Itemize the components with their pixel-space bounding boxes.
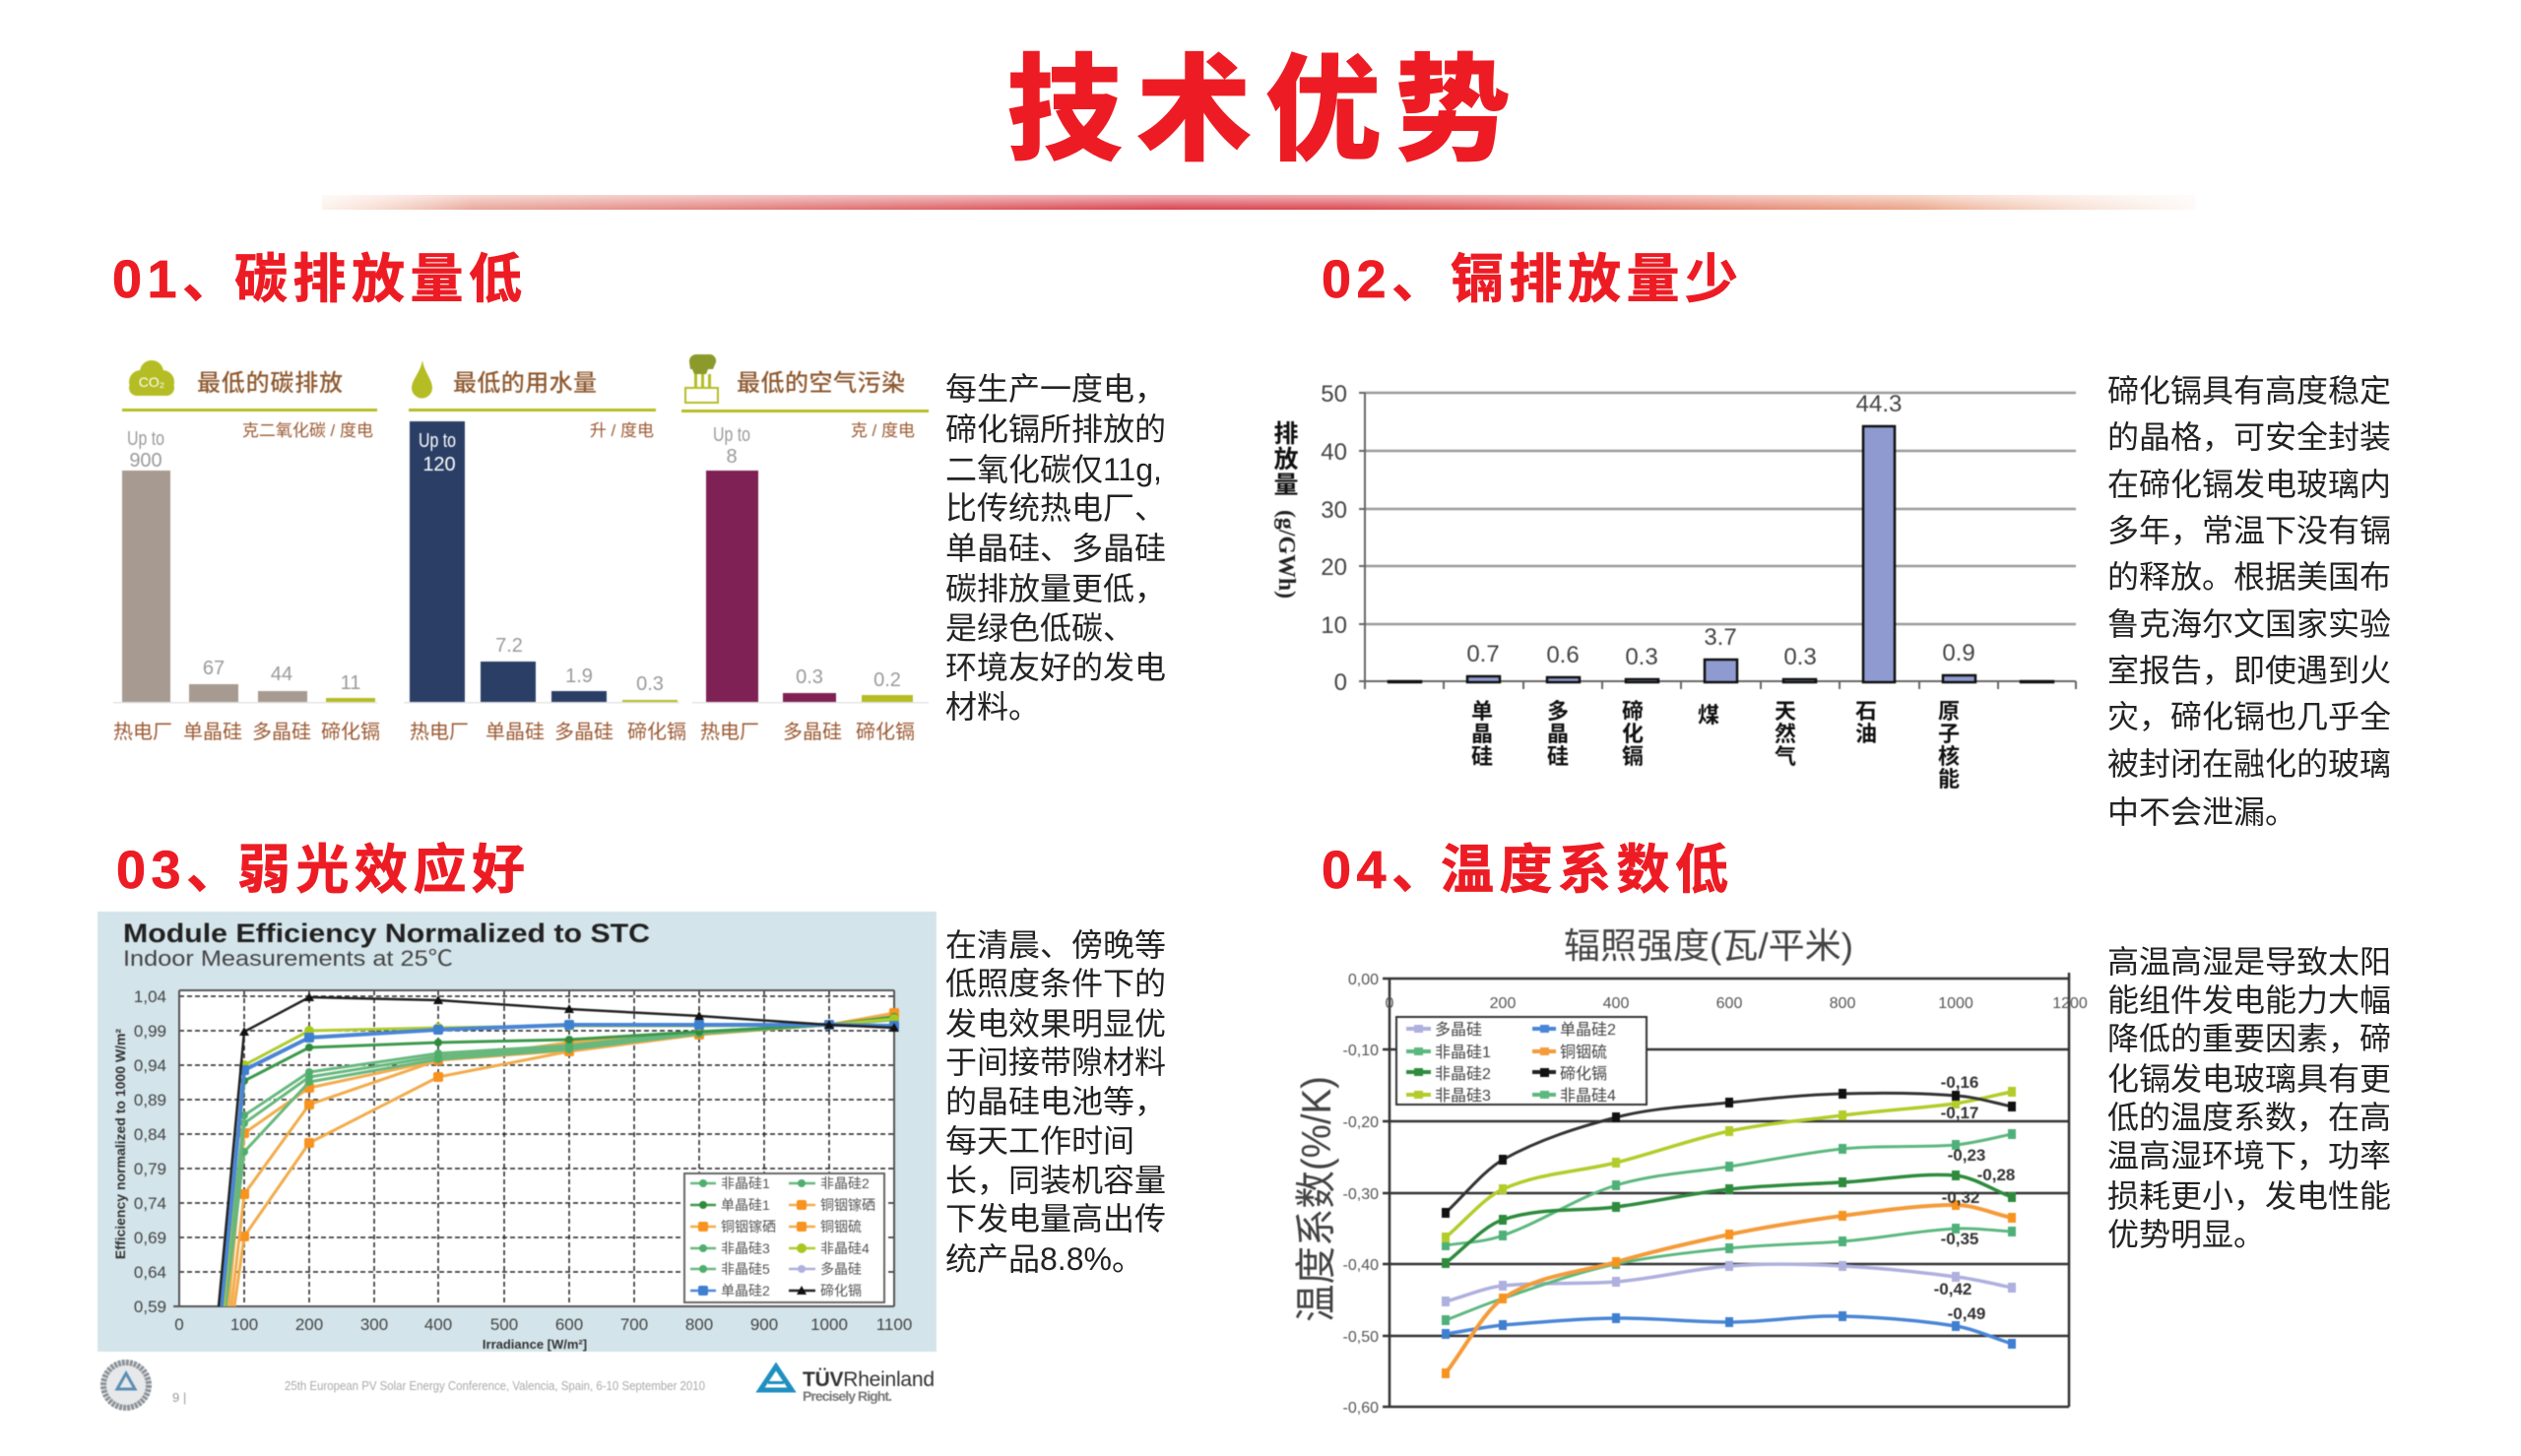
category labels: 核 xyxy=(1938,744,1960,769)
y axis labels: 0,59 xyxy=(134,1298,166,1316)
icon: CO2 cloud xyxy=(129,360,174,396)
x axis labels: 600 xyxy=(555,1315,583,1334)
x axis labels: 0 xyxy=(174,1315,184,1334)
x axis labels: 200 xyxy=(1490,995,1516,1012)
value labels: 0.3 xyxy=(1783,644,1817,670)
x axis labels: 600 xyxy=(1716,995,1742,1012)
category labels: 镉 xyxy=(1622,744,1644,769)
text block: 04: 低的温度系数，在高 xyxy=(2107,1100,2391,1135)
category labels: 碲 xyxy=(1622,699,1644,724)
value labels: 0.3 xyxy=(1625,644,1658,670)
text block: 03: 统产品8.8%。 xyxy=(945,1241,1143,1277)
category labels: 然 xyxy=(1775,722,1796,746)
category labels: 天 xyxy=(1775,699,1796,724)
y axis labels: -0,50 xyxy=(1343,1329,1379,1346)
data labels xyxy=(1934,1073,2015,1323)
category labels: 子 xyxy=(1938,722,1960,746)
bars: carbon xyxy=(122,471,375,702)
axis numbers: 20 xyxy=(1321,554,1347,581)
value labels xyxy=(1466,391,1975,670)
bars xyxy=(1389,426,2053,682)
legend: 铜铟镓硒 xyxy=(820,1197,875,1213)
legend: 非晶硅4 xyxy=(820,1240,870,1256)
x axis labels xyxy=(1386,995,2088,1012)
category labels: 硅 xyxy=(1471,744,1493,769)
y axis labels xyxy=(1343,972,1379,1417)
bar values: Up to xyxy=(419,430,456,452)
heading: 01: 01、 xyxy=(112,250,241,309)
y axis labels: -0,40 xyxy=(1343,1257,1379,1274)
legend: 单晶硅2 xyxy=(721,1283,770,1298)
data labels: -0,28 xyxy=(1977,1166,2015,1184)
bars: water xyxy=(410,421,678,702)
data labels: -0,35 xyxy=(1941,1230,1978,1248)
title divider bar xyxy=(322,195,2195,210)
x axis labels: 900 xyxy=(750,1315,778,1334)
legend: 单晶硅1 xyxy=(721,1197,770,1213)
category labels: 多 xyxy=(1547,699,1569,724)
category labels: 原 xyxy=(1938,699,1960,724)
heading: 03: 03、 xyxy=(116,841,245,900)
axis numbers xyxy=(1321,381,1347,696)
category labels: 多晶硅 xyxy=(252,721,311,743)
category labels: 碲化镉 xyxy=(321,721,380,743)
category labels: 多晶硅 xyxy=(783,721,842,743)
y axis labels: -0,20 xyxy=(1343,1114,1379,1131)
category labels xyxy=(113,721,915,743)
legend: 碲化镉 xyxy=(820,1283,862,1298)
bar values: 1.9 xyxy=(565,665,593,687)
bar values: 67 xyxy=(203,658,225,679)
text block: 01: 碳排放量更低， xyxy=(945,571,1166,606)
y axis title: 温度系数(%/K) xyxy=(1293,1076,1339,1322)
x axis labels: 400 xyxy=(424,1315,452,1334)
legend: 非晶硅2 xyxy=(820,1175,870,1191)
value labels: 0.7 xyxy=(1466,641,1500,667)
category labels: 油 xyxy=(1855,722,1877,746)
x axis title: Irradiance [W/m²] xyxy=(483,1337,587,1352)
y axis title: (g/GWh) xyxy=(1273,510,1299,599)
x axis labels: 1100 xyxy=(876,1315,912,1334)
text block: 03: 下发电量高出传 xyxy=(945,1201,1166,1236)
category labels: 硅 xyxy=(1547,744,1569,769)
title: 技术优势 xyxy=(1006,46,1511,176)
legend: 非晶硅5 xyxy=(721,1261,770,1277)
panel: carbon, water, air bar charts: 克 / 度电 xyxy=(851,421,915,440)
bar values: Up to xyxy=(713,424,750,446)
category labels xyxy=(1471,699,1960,791)
x axis labels: 100 xyxy=(230,1315,258,1334)
y axis title: Efficiency normalized to 1000 W/m² xyxy=(112,1029,128,1259)
y axis labels: 0,84 xyxy=(134,1125,166,1144)
y axis labels: -0,60 xyxy=(1343,1400,1379,1417)
text block: 01: 每生产一度电， xyxy=(945,371,1166,407)
category labels: 热电厂 xyxy=(700,721,759,743)
category labels: 气 xyxy=(1775,744,1796,769)
data labels: -0,23 xyxy=(1948,1146,1985,1165)
chart: temperature coefficient xyxy=(1293,925,2088,1417)
bars: air xyxy=(706,471,913,702)
y axis title: 排 xyxy=(1273,420,1299,448)
legend: 非晶硅1 xyxy=(1435,1044,1491,1061)
y axis labels: 0,99 xyxy=(134,1022,166,1041)
text block: 04: 化镉发电玻璃具有更 xyxy=(2107,1061,2391,1097)
chart title: 辐照强度(瓦/平米) xyxy=(1564,925,1853,966)
x axis labels: 200 xyxy=(295,1315,323,1334)
text block: 02: 多年，常温下没有镉 xyxy=(2107,513,2391,548)
legend: 碲化镉 xyxy=(1560,1065,1607,1083)
bar values: 0.3 xyxy=(636,673,664,695)
text block: 02: 的晶格，可安全封装 xyxy=(2107,419,2391,455)
text block: 04: 温高湿环境下，功率 xyxy=(2107,1138,2391,1173)
text block: 01: 单晶硅、多晶硅 xyxy=(945,531,1166,566)
legend: 多晶硅 xyxy=(820,1261,862,1277)
chart subtitle: Indoor Measurements at 25℃ xyxy=(123,946,453,971)
text block: 01: 二氧化碳仅11g, xyxy=(945,452,1162,487)
heading: 02: 02、 xyxy=(1322,250,1451,309)
axis numbers: 30 xyxy=(1321,497,1347,524)
value labels: 0.9 xyxy=(1942,640,1975,666)
text block: 03: 长，同装机容量 xyxy=(945,1163,1166,1198)
y axis labels: 0,64 xyxy=(134,1263,166,1282)
data labels: -0,16 xyxy=(1941,1073,1978,1092)
heading: 02: 镉排放量少 xyxy=(1451,250,1743,309)
curves xyxy=(1446,1092,2012,1373)
bar values: 0.3 xyxy=(796,666,823,688)
axis numbers: 0 xyxy=(1334,669,1347,696)
icon: factory xyxy=(685,354,718,403)
legend: 非晶硅3 xyxy=(1435,1087,1491,1105)
bar values: Up to xyxy=(127,428,164,450)
category labels: 热电厂 xyxy=(113,721,172,743)
category labels: 多晶硅 xyxy=(554,721,614,743)
panel: carbon, water, air bar charts xyxy=(113,354,929,743)
x axis labels: 800 xyxy=(685,1315,713,1334)
legend: 铜铟镓硒 xyxy=(721,1219,776,1234)
y axis title: 放 xyxy=(1273,446,1299,474)
y axis labels: -0,30 xyxy=(1343,1186,1379,1203)
icon: CO2 cloud: CO₂ xyxy=(139,374,164,390)
text block: 03: 在清晨、傍晚等 xyxy=(945,927,1166,963)
y axis labels: 0,74 xyxy=(134,1194,166,1213)
text block: 02: 中不会泄漏。 xyxy=(2107,794,2296,830)
legend: 铜铟硫 xyxy=(1560,1044,1607,1061)
heading: lowest air pollution: 最低的空气污染 xyxy=(737,370,905,397)
text block: 03: 每天工作时间 xyxy=(945,1123,1134,1159)
axis numbers: 10 xyxy=(1321,612,1347,639)
text block: 01: 材料。 xyxy=(945,689,1040,725)
category labels: 碲化镉 xyxy=(856,721,915,743)
bar values: 11 xyxy=(341,672,360,694)
text block: 04: 降低的重要因素，碲 xyxy=(2107,1021,2391,1056)
data labels: -0,17 xyxy=(1941,1104,1978,1122)
x axis labels: 1200 xyxy=(2052,995,2088,1012)
y axis labels: 0,94 xyxy=(134,1056,166,1075)
category labels: 单 xyxy=(1471,699,1493,724)
text block: 04: 能组件发电能力大幅 xyxy=(2107,982,2391,1018)
category labels: 单晶硅 xyxy=(485,721,545,743)
bar values: 900 xyxy=(129,450,162,472)
text block: 01: 是绿色低碳、 xyxy=(945,610,1134,646)
value labels: 3.7 xyxy=(1704,624,1737,651)
legend xyxy=(684,1173,884,1302)
bar values: 120 xyxy=(422,454,456,475)
x axis labels: 0 xyxy=(1386,995,1394,1012)
category labels: 碲化镉 xyxy=(627,721,686,743)
legend xyxy=(1396,1017,1647,1105)
heading: lowest carbon: 最低的碳排放 xyxy=(197,370,343,397)
legend: 非晶硅1 xyxy=(721,1175,770,1191)
bar values: 44 xyxy=(271,664,292,685)
data labels: -0,49 xyxy=(1948,1304,1985,1323)
axis numbers: 50 xyxy=(1321,381,1347,408)
legend: 铜铟硫 xyxy=(820,1219,862,1234)
value labels: 44.3 xyxy=(1856,391,1902,417)
category labels: 石 xyxy=(1855,699,1877,724)
heading: lowest water: 最低的用水量 xyxy=(453,370,597,397)
axis numbers: 40 xyxy=(1321,439,1347,466)
legend: 非晶硅3 xyxy=(721,1240,770,1256)
category labels: 单晶硅 xyxy=(183,721,242,743)
category labels: 化 xyxy=(1622,722,1644,746)
text block: 03: 的晶硅电池等， xyxy=(945,1084,1166,1119)
y axis labels: 1,04 xyxy=(134,987,166,1006)
category labels: 晶 xyxy=(1547,722,1569,746)
footer: conference text: 25th European PV Solar Energy Conference, Valencia, Spain, 6-10 September 2010 xyxy=(285,1378,705,1393)
legend: 多晶硅 xyxy=(1435,1021,1482,1039)
x axis labels: 1000 xyxy=(1938,995,1973,1012)
series xyxy=(219,997,894,1306)
text block: 04: 损耗更小，发电性能 xyxy=(2107,1178,2391,1214)
y axis labels: 0,69 xyxy=(134,1229,166,1247)
y axis labels: -0,10 xyxy=(1343,1043,1379,1059)
y axis labels: 0,79 xyxy=(134,1160,166,1178)
bar values: 7.2 xyxy=(495,635,523,657)
data labels: -0,42 xyxy=(1934,1280,1972,1298)
heading: 04: 温度系数低 xyxy=(1441,841,1733,900)
bar values: 8 xyxy=(726,446,738,468)
legend: 非晶硅2 xyxy=(1435,1065,1491,1083)
text block: 03: 低照度条件下的 xyxy=(945,966,1166,1001)
x axis labels: 1000 xyxy=(810,1315,848,1334)
heading: 03: 弱光效应好 xyxy=(237,841,530,900)
panel: module efficiency chart xyxy=(97,912,937,1408)
legend: 单晶硅2 xyxy=(1560,1021,1616,1039)
text block: 02: 被封闭在融化的玻璃 xyxy=(2107,746,2391,782)
text block: 02: 在碲化镉发电玻璃内 xyxy=(2107,467,2391,502)
text block: 02: 碲化镉具有高度稳定 xyxy=(2107,373,2391,409)
footer: seal xyxy=(103,1362,149,1408)
logo: TUV Rheinland xyxy=(760,1366,935,1404)
text block: 02: 灾，碲化镉也几乎全 xyxy=(2107,699,2391,734)
footer: page number: 9 | xyxy=(172,1390,186,1405)
heading: 04: 04、 xyxy=(1322,841,1451,900)
text block: 01: 环境友好的发电 xyxy=(945,650,1166,685)
x axis labels: 300 xyxy=(360,1315,388,1334)
x axis labels xyxy=(174,1315,912,1334)
y axis labels: 0,89 xyxy=(134,1091,166,1109)
panel: carbon, water, air bar charts: 克二氧化碳 / 度电 xyxy=(242,421,373,440)
x axis labels: 400 xyxy=(1603,995,1629,1012)
category labels: 晶 xyxy=(1471,722,1493,746)
text block: 02: 室报告，即使遇到火 xyxy=(2107,653,2391,688)
bar values xyxy=(127,424,901,695)
icon: water drop xyxy=(412,360,432,399)
text block: 01: 比传统热电厂、 xyxy=(945,490,1166,526)
category labels: 能 xyxy=(1938,767,1960,791)
x axis labels: 500 xyxy=(490,1315,518,1334)
y axis labels xyxy=(134,987,166,1316)
text block: 02: 鲁克海尔文国家实验 xyxy=(2107,606,2391,642)
category labels: 热电厂 xyxy=(410,721,469,743)
y axis title xyxy=(1273,420,1299,599)
text block: 04: 高温高湿是导致太阳 xyxy=(2107,944,2391,980)
bar values: 0.2 xyxy=(873,669,901,691)
text block: 03: 发电效果明显优 xyxy=(945,1006,1166,1042)
y axis labels: 0,00 xyxy=(1348,972,1379,988)
text block: 01: 碲化镉所排放的 xyxy=(945,411,1166,447)
text block: 03: 于间接带隙材料 xyxy=(945,1045,1166,1080)
category labels: 煤 xyxy=(1698,703,1719,728)
text block: 04: 优势明显。 xyxy=(2107,1217,2265,1252)
logo: TUV Rheinland: Precisely Right. xyxy=(803,1388,892,1404)
y axis title: 量 xyxy=(1273,472,1299,499)
value labels: 0.6 xyxy=(1546,642,1580,668)
x axis labels: 800 xyxy=(1830,995,1855,1012)
heading: 01: 碳排放量低 xyxy=(234,250,528,309)
legend: 非晶硅4 xyxy=(1560,1087,1616,1105)
x axis labels: 700 xyxy=(620,1315,648,1334)
chart: cadmium emissions bar chart xyxy=(1273,381,2076,791)
panel: carbon, water, air bar charts: 升 / 度电 xyxy=(590,421,654,440)
logo: TUV Rheinland: TÜVRheinland xyxy=(803,1368,935,1391)
chart title: Module Efficiency Normalized to STC xyxy=(123,918,650,948)
text block: 02: 的释放。根据美国布 xyxy=(2107,559,2391,595)
data labels: -0,32 xyxy=(1942,1188,1979,1207)
